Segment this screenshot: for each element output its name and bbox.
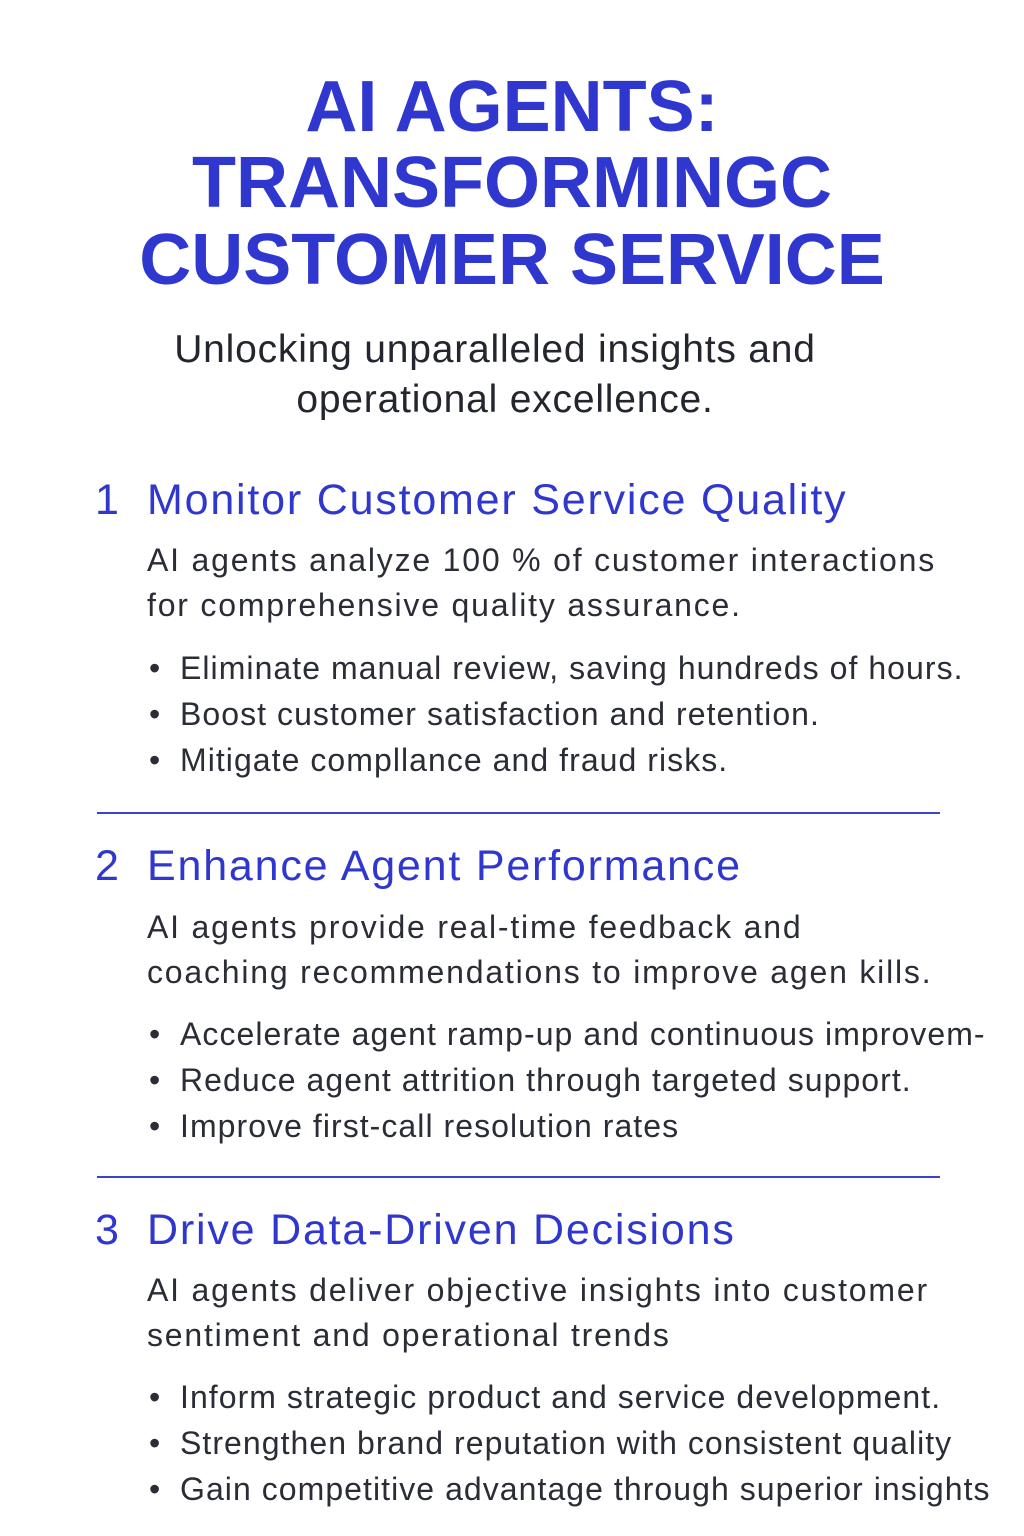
heading 3: [95, 1206, 736, 1254]
bullets 3: •: [149, 1471, 160, 1507]
bullets 1: •: [149, 742, 160, 778]
bullets 2: Improve first-call resolution rates: [180, 1108, 679, 1144]
bullets 3: [149, 1379, 991, 1507]
title: AI AGENTS:: [305, 67, 719, 147]
bullets 2: •: [149, 1062, 160, 1098]
title: CUSTOMER SERVICE: [139, 220, 885, 300]
subtitle: Unlocking unparalleled insights and: [174, 328, 816, 371]
body 1: for comprehensive quality assurance.: [147, 587, 742, 623]
subtitle: operational excellence.: [296, 378, 714, 421]
section 3: data-driven decisions: 3: [95, 1206, 121, 1254]
bullets 3: Strengthen brand reputation with consistent quality: [180, 1425, 952, 1461]
bullets 1: [149, 650, 964, 778]
bullets 3: •: [149, 1379, 160, 1415]
bullets 2: Reduce agent attrition through targeted support.: [180, 1062, 912, 1098]
bullets 1: Boost customer satisfaction and retention.: [180, 696, 820, 732]
bullets 2: Accelerate agent ramp-up and continuous improvem-: [180, 1016, 986, 1052]
section 2: agent performance: [95, 842, 986, 1144]
body 1: AI agents analyze 100 % of customer interactions: [147, 542, 936, 578]
heading 2: [95, 842, 742, 890]
body 3: sentiment and operational trends: [147, 1317, 671, 1353]
bullets 2: •: [149, 1016, 160, 1052]
title: TRANSFORMINGC: [192, 143, 832, 223]
section 1: monitor quality: Monitor Customer Service Quality: [147, 476, 847, 524]
bullets 1: Mitigate compllance and fraud risks.: [180, 742, 728, 778]
body 3: [147, 1272, 929, 1353]
bullets 1: •: [149, 696, 160, 732]
bullets 3: Gain competitive advantage through superior insights: [180, 1471, 991, 1507]
body 1: [147, 542, 936, 623]
section 3: data-driven decisions: [95, 1206, 991, 1507]
bullets 1: Eliminate manual review, saving hundreds of hours.: [180, 650, 964, 686]
subtitle: [174, 328, 816, 421]
section 1: monitor quality: 1: [95, 476, 121, 524]
body 3: AI agents deliver objective insights into customer: [147, 1272, 929, 1308]
title: [139, 67, 885, 300]
section 2: agent performance: 2: [95, 842, 121, 890]
body 2: [147, 909, 932, 990]
bullets 1: •: [149, 650, 160, 686]
bullets 2: •: [149, 1108, 160, 1144]
bullets 3: •: [149, 1425, 160, 1461]
bullets 2: [149, 1016, 986, 1144]
body 2: AI agents provide real-time feedback and: [147, 909, 802, 945]
bullets 3: Inform strategic product and service development.: [180, 1379, 941, 1415]
section 1: monitor quality: [95, 476, 964, 778]
section 3: data-driven decisions: Drive Data-Driven Decisions: [147, 1206, 736, 1254]
section 2: agent performance: Enhance Agent Performance: [147, 842, 742, 890]
heading 1: [95, 476, 847, 524]
body 2: coaching recommendations to improve agen kills.: [147, 954, 932, 990]
